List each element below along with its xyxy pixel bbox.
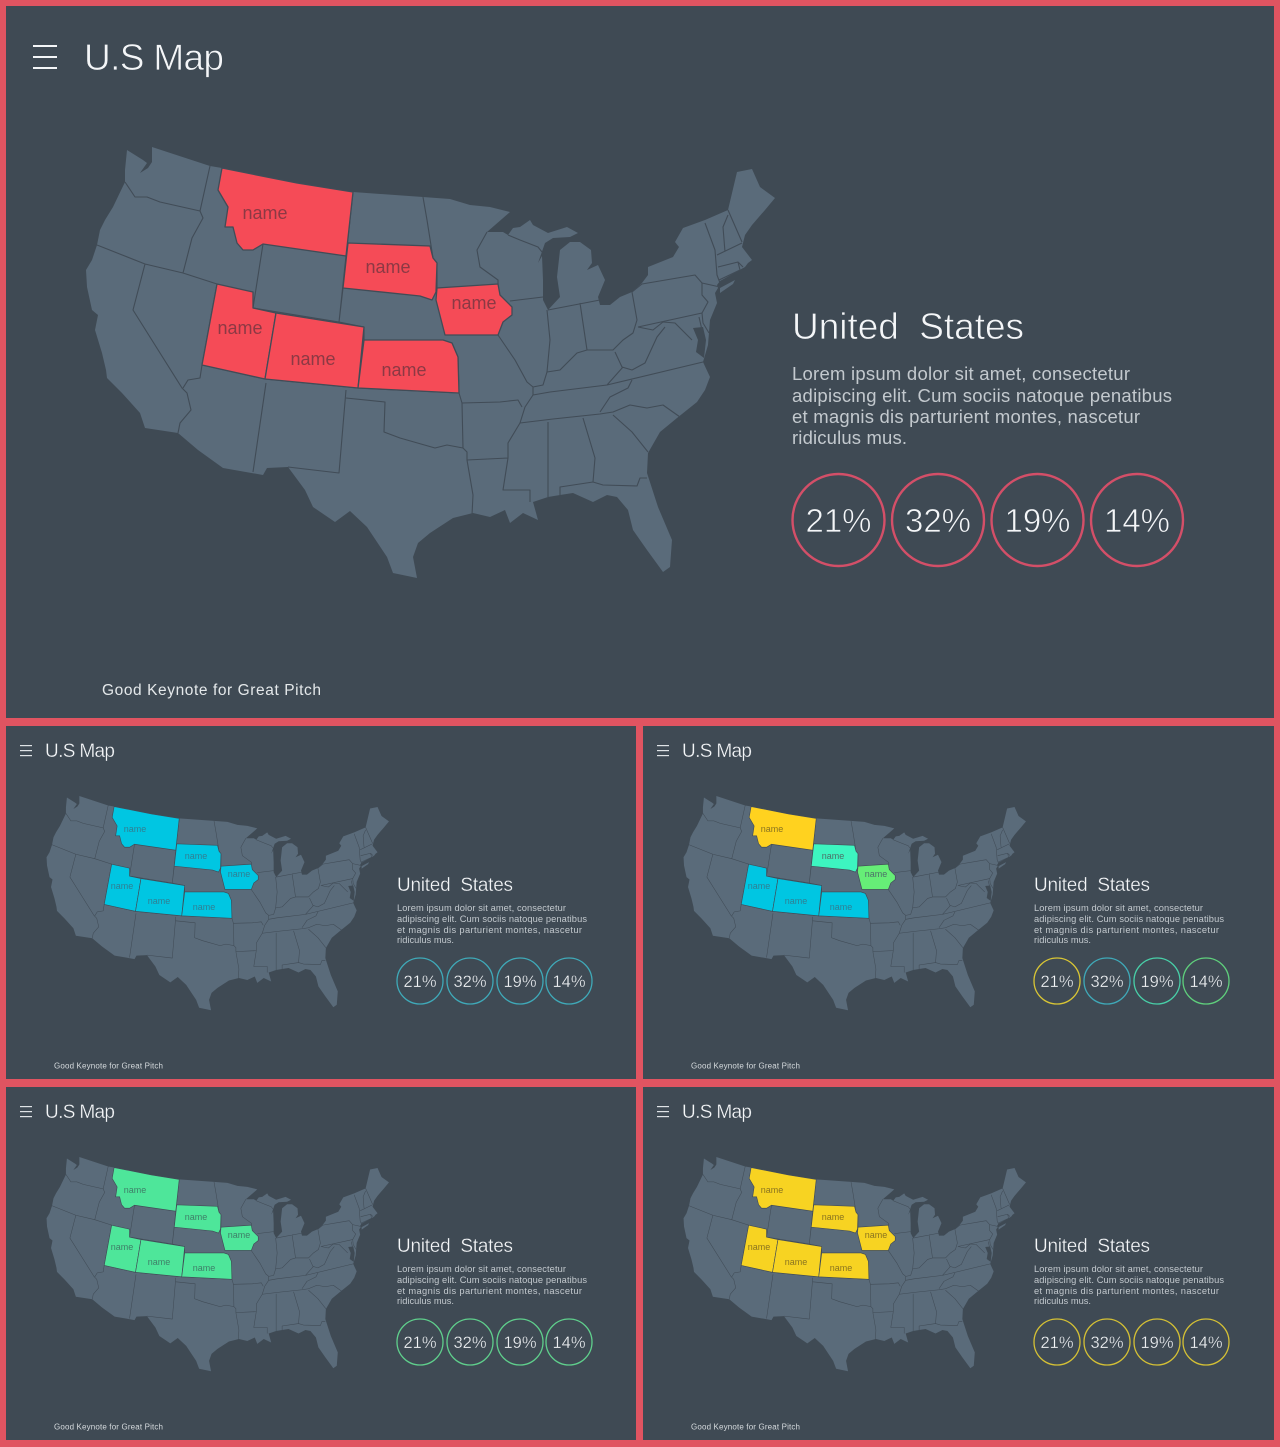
percentages: 32% (453, 1334, 487, 1352)
body text: Lorem ipsum dolor sit amet, consectetur (792, 363, 1130, 384)
US map: name (228, 1230, 250, 1240)
panel: cyan slide (6, 726, 636, 1079)
US map (684, 796, 1026, 1010)
US map: name (228, 869, 250, 879)
US map (47, 1157, 389, 1371)
US map: name (865, 1230, 887, 1240)
body text: ridiculus mus. (397, 1296, 454, 1306)
US map: name (185, 1212, 207, 1222)
title: U.S Map (45, 1102, 115, 1123)
US map with highlighted states (86, 147, 775, 578)
percentages: 19% (1140, 973, 1174, 991)
percentage circles (397, 958, 592, 1004)
US map with highlighted states: name (217, 318, 263, 338)
percentages: 14% (1189, 973, 1223, 991)
body text: Lorem ipsum dolor sit amet, consectetur (397, 1264, 566, 1274)
body text: adipiscing elit. Cum sociis natoque penatibus (1034, 1275, 1224, 1285)
icon: menu (657, 745, 669, 756)
title: U.S Map (84, 37, 224, 78)
US map with highlighted states: name (381, 360, 427, 380)
percentages: 19% (1004, 502, 1071, 539)
body text: adipiscing elit. Cum sociis natoque penatibus (397, 1275, 587, 1285)
US map with highlighted states: name (451, 293, 497, 313)
body text: et magnis dis parturient montes, nascetur (1034, 1286, 1219, 1296)
US map: name (785, 896, 807, 906)
percentages: 14% (552, 1334, 586, 1352)
US map: name (822, 851, 844, 861)
percentages: 14% (552, 973, 586, 991)
icon: menu (33, 45, 57, 69)
US map: name (785, 1257, 807, 1267)
percentages: 32% (453, 973, 487, 991)
US map (684, 1157, 1026, 1371)
US map: name (748, 881, 770, 891)
heading: United States (792, 306, 1024, 347)
body text (397, 903, 587, 945)
panel: yellow slide (643, 1087, 1274, 1440)
percentages (805, 502, 1170, 539)
US map: name (193, 1263, 215, 1273)
panel: green slide (6, 1087, 636, 1440)
heading: United States (397, 875, 513, 896)
percentages: 19% (503, 1334, 537, 1352)
US map: name (185, 851, 207, 861)
US map: name (111, 1242, 133, 1252)
US map: name (761, 824, 783, 834)
percentages: 21% (1040, 973, 1074, 991)
icon: menu (20, 745, 32, 756)
US map with highlighted states: name (290, 349, 336, 369)
percentage circles (792, 474, 1183, 566)
percentages: 32% (905, 502, 971, 539)
body text: ridiculus mus. (397, 935, 454, 945)
percentage circles (1034, 1319, 1229, 1365)
percentages: 21% (1040, 1334, 1074, 1352)
heading: United States (1034, 875, 1150, 896)
heading: United States (1034, 1236, 1150, 1257)
percentages (403, 1334, 586, 1352)
body text: Lorem ipsum dolor sit amet, consectetur (1034, 1264, 1203, 1274)
body text (792, 363, 1172, 448)
US map with highlighted states: name (365, 257, 411, 277)
US map: name (865, 869, 887, 879)
US map: name (148, 1257, 170, 1267)
footer: Good Keynote for Great Pitch (102, 682, 321, 699)
body text: et magnis dis parturient montes, nascetur (1034, 925, 1219, 935)
body text (397, 1264, 587, 1306)
heading: United States (397, 1236, 513, 1257)
US map: name (148, 896, 170, 906)
percentages (403, 973, 586, 991)
body text (1034, 903, 1224, 945)
percentages: 19% (503, 973, 537, 991)
title: U.S Map (682, 741, 752, 762)
footer: Good Keynote for Great Pitch (691, 1062, 800, 1070)
percentages: 19% (1140, 1334, 1174, 1352)
body text: ridiculus mus. (792, 427, 907, 448)
body text: adipiscing elit. Cum sociis natoque penatibus (397, 914, 587, 924)
percentages: 21% (403, 973, 437, 991)
body text: adipiscing elit. Cum sociis natoque penatibus (1034, 914, 1224, 924)
body text: Lorem ipsum dolor sit amet, consectetur (1034, 903, 1203, 913)
US map: name (748, 1242, 770, 1252)
US map: name (111, 881, 133, 891)
body text: et magnis dis parturient montes, nascetur (397, 1286, 582, 1296)
US map: name (822, 1212, 844, 1222)
footer: Good Keynote for Great Pitch (54, 1422, 163, 1432)
panel: main map slide (6, 6, 1274, 718)
body text: ridiculus mus. (1034, 935, 1091, 945)
percentages: 32% (1090, 973, 1124, 991)
body text: ridiculus mus. (1034, 1296, 1091, 1306)
US map with highlighted states: name (242, 203, 288, 223)
US map: name (124, 1185, 146, 1195)
percentages: 21% (403, 1334, 437, 1352)
percentage circles (397, 1319, 592, 1365)
percentage circles (1034, 958, 1229, 1004)
icon: menu (657, 1106, 669, 1117)
percentages (1040, 1334, 1223, 1352)
percentages: 14% (1189, 1334, 1223, 1352)
body text (1034, 1264, 1224, 1306)
percentages: 32% (1090, 1334, 1124, 1352)
body text: Lorem ipsum dolor sit amet, consectetur (397, 903, 566, 913)
US map: name (830, 1263, 852, 1273)
percentages: 14% (1104, 502, 1170, 539)
body text: et magnis dis parturient montes, nascetur (397, 925, 582, 935)
percentages (1040, 973, 1223, 991)
US map: name (830, 902, 852, 912)
panel: multicolor slide (643, 726, 1274, 1079)
US map: name (761, 1185, 783, 1195)
US map: name (124, 824, 146, 834)
body text: et magnis dis parturient montes, nascetur (792, 406, 1140, 427)
US map: name (193, 902, 215, 912)
footer: Good Keynote for Great Pitch (54, 1062, 163, 1070)
title: U.S Map (682, 1102, 752, 1123)
percentages: 21% (805, 502, 872, 539)
body text: adipiscing elit. Cum sociis natoque penatibus (792, 385, 1172, 406)
icon: menu (20, 1106, 32, 1117)
footer: Good Keynote for Great Pitch (691, 1422, 800, 1432)
US map (47, 796, 389, 1010)
title: U.S Map (45, 741, 115, 762)
